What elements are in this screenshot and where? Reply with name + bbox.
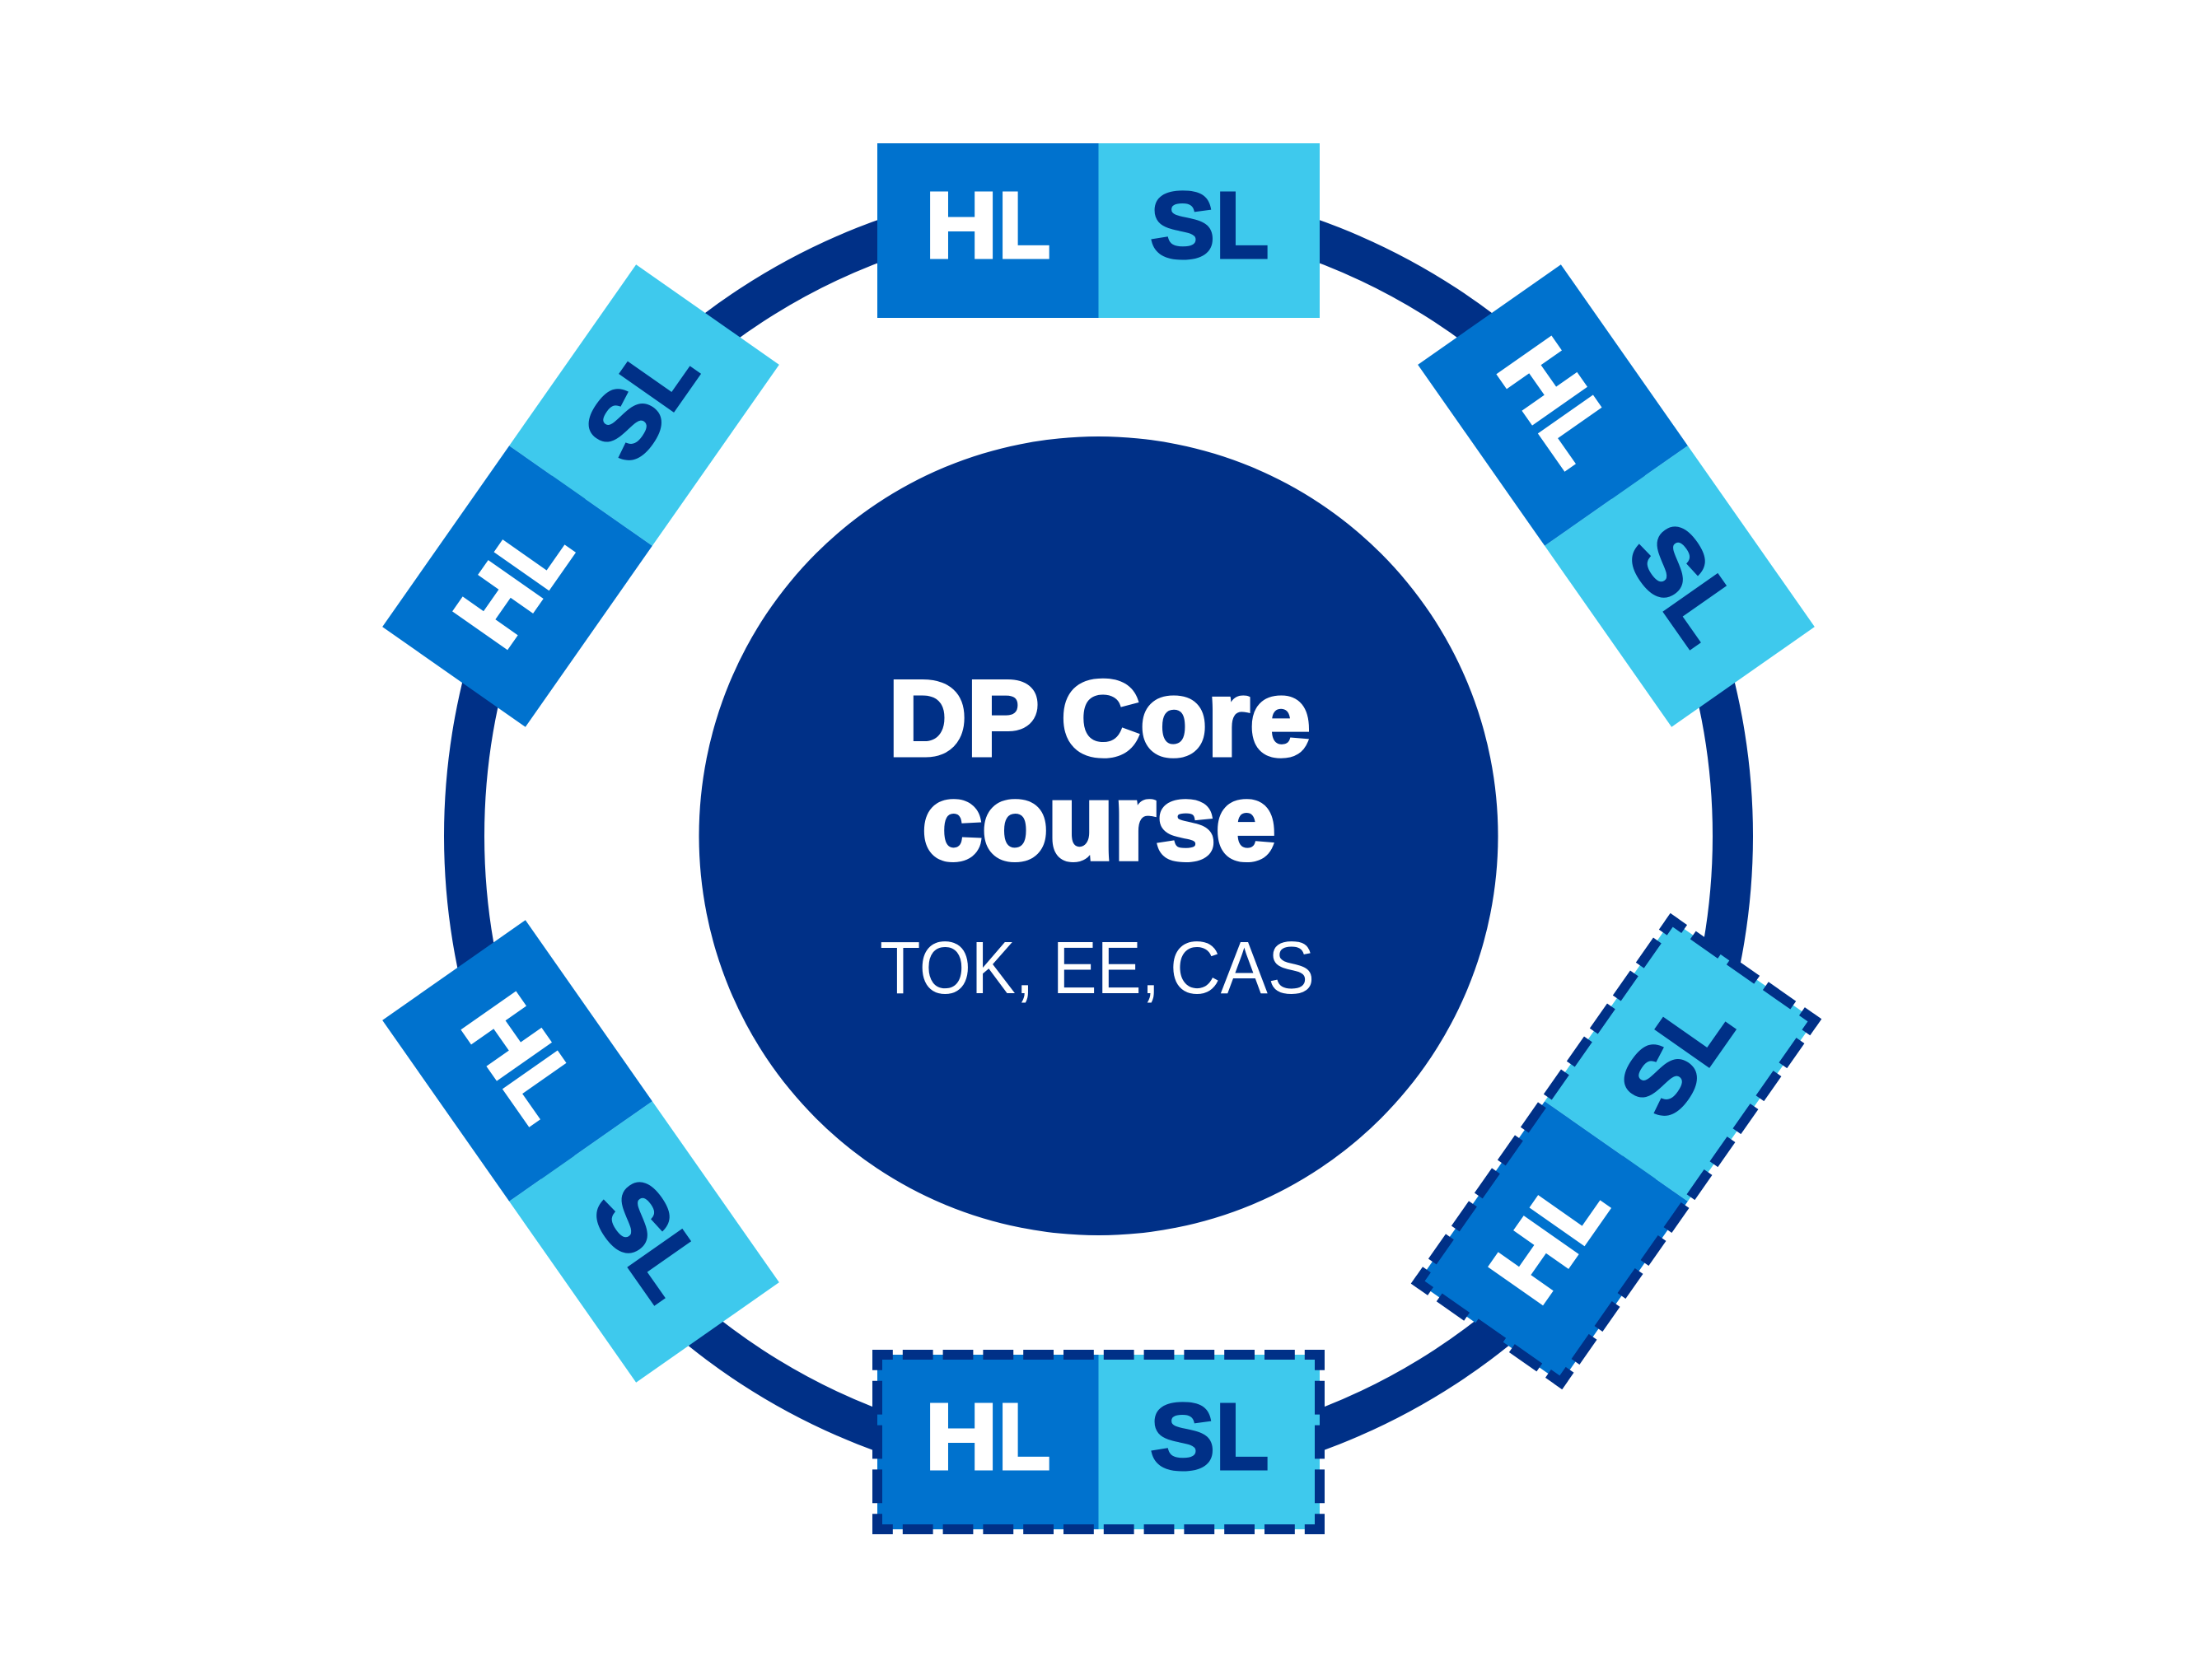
course card: top left: H — [434, 545, 561, 665]
course card: top left: L — [476, 502, 591, 604]
ring connecting the courses — [465, 202, 1733, 1470]
course card: top right: L — [1521, 381, 1635, 483]
course card: bottom left: L — [485, 1037, 600, 1139]
course card: bottom right, dashed outline — [1411, 913, 1821, 1389]
course card: bottom left: L — [610, 1215, 725, 1318]
course card: top left: S — [563, 368, 685, 480]
course card: top right: L — [1645, 559, 1760, 662]
course card: top right — [1418, 264, 1815, 727]
course card: bottom right, dashed outline: H — [1470, 1201, 1596, 1320]
course card: bottom left: H — [443, 977, 570, 1095]
course card: bottom, dashed outline: H — [925, 1385, 998, 1489]
course card: top: L — [1216, 174, 1269, 278]
course card: top left: L — [601, 324, 717, 427]
course card: bottom, dashed outline: S — [1150, 1385, 1214, 1489]
course card: top: H — [925, 174, 998, 278]
course card: bottom right, dashed outline: L — [1637, 979, 1752, 1082]
heading line 2: course — [923, 762, 1275, 882]
course card: bottom right, dashed outline: S — [1599, 1024, 1721, 1136]
course card: bottom left: S — [573, 1161, 694, 1273]
course card: bottom, dashed outline: L — [1216, 1385, 1269, 1489]
course card: top: L — [998, 174, 1050, 278]
course card: top right: H — [1479, 321, 1606, 440]
heading line 1: Core — [1061, 658, 1311, 778]
heading line 1 — [888, 658, 1311, 778]
course card: top: S — [1150, 174, 1214, 278]
course card: bottom right, dashed outline: L — [1512, 1158, 1627, 1260]
course card: bottom, dashed outline — [872, 1350, 1325, 1534]
course card: bottom, dashed outline: L — [998, 1385, 1050, 1489]
heading line 1: DP — [888, 658, 1040, 778]
course card: top left — [382, 264, 779, 727]
course card: bottom left — [382, 920, 779, 1383]
course card: top — [877, 143, 1320, 318]
core components text: TOK, EE, — [880, 927, 1160, 1010]
central circle: DP Core course — [699, 436, 1498, 1235]
course card: top right: S — [1608, 506, 1730, 618]
core components text: CAS — [1170, 927, 1315, 1010]
